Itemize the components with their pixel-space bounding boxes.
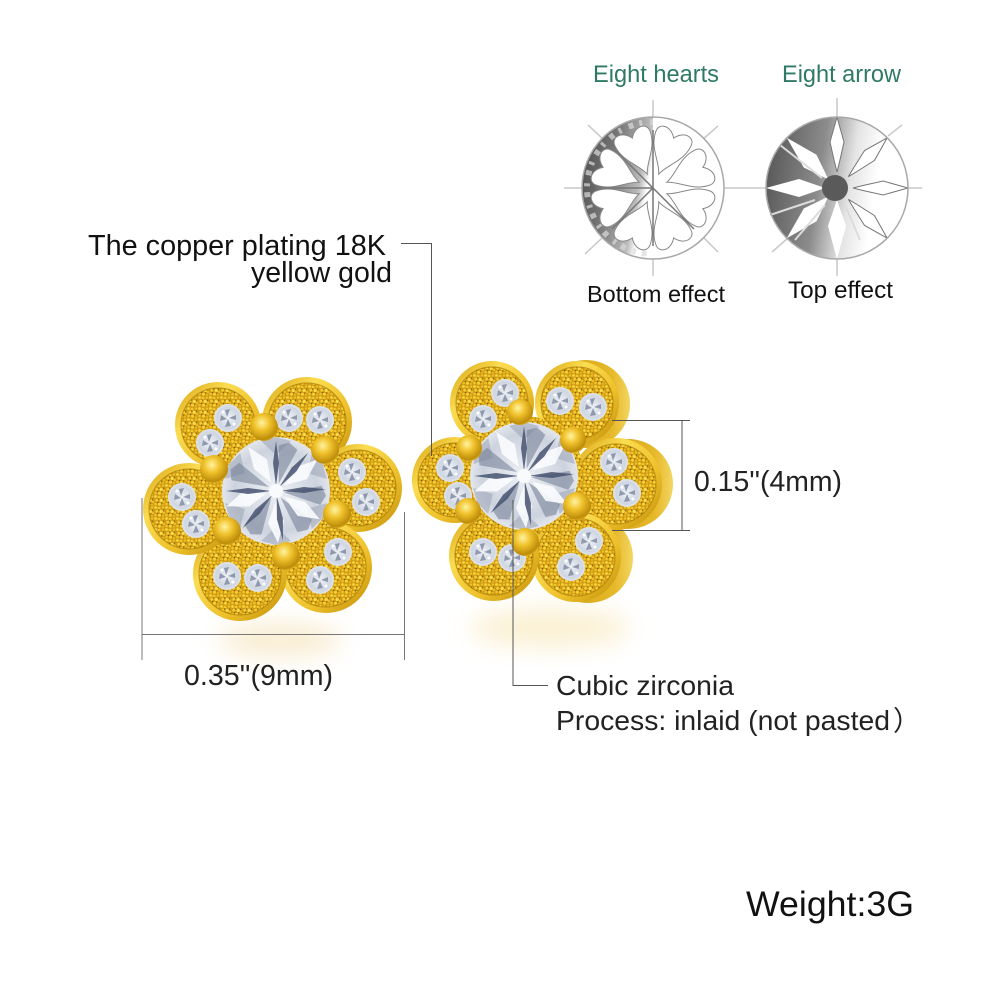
caption: top effect: Top effect [788, 278, 893, 304]
diagram: eight arrow [745, 98, 922, 276]
leader line: copper plating [401, 244, 432, 456]
label: width: 0.35''(9mm) [184, 660, 333, 692]
left earring [146, 380, 399, 618]
label: cubic zirconia: ） [893, 705, 920, 736]
label: plating: The copper plating 18K [88, 230, 386, 262]
reflection: right earring [470, 608, 630, 648]
diagram: eight hearts [564, 100, 745, 276]
label: cubic zirconia: Cubic zirconia [556, 670, 735, 701]
label: plating [88, 230, 392, 289]
label: cubic zirconia: Process: inlaid (not pasted [556, 705, 890, 736]
label: cubic zirconia [556, 670, 920, 736]
dimension lines: width [142, 498, 404, 660]
heading: eight hearts: Eight hearts [593, 62, 719, 88]
right earring [415, 360, 673, 603]
heading: eight arrow: Eight arrow [782, 62, 902, 88]
dimension lines: height [612, 420, 690, 530]
leader line: cubic zirconia [513, 500, 548, 686]
caption: bottom effect: Bottom effect [587, 281, 726, 307]
label: height: 0.15''(4mm) [694, 466, 842, 498]
label: weight: Weight:3G [746, 884, 914, 924]
reflection: left earring [218, 624, 342, 656]
label: plating: yellow gold [251, 257, 392, 289]
